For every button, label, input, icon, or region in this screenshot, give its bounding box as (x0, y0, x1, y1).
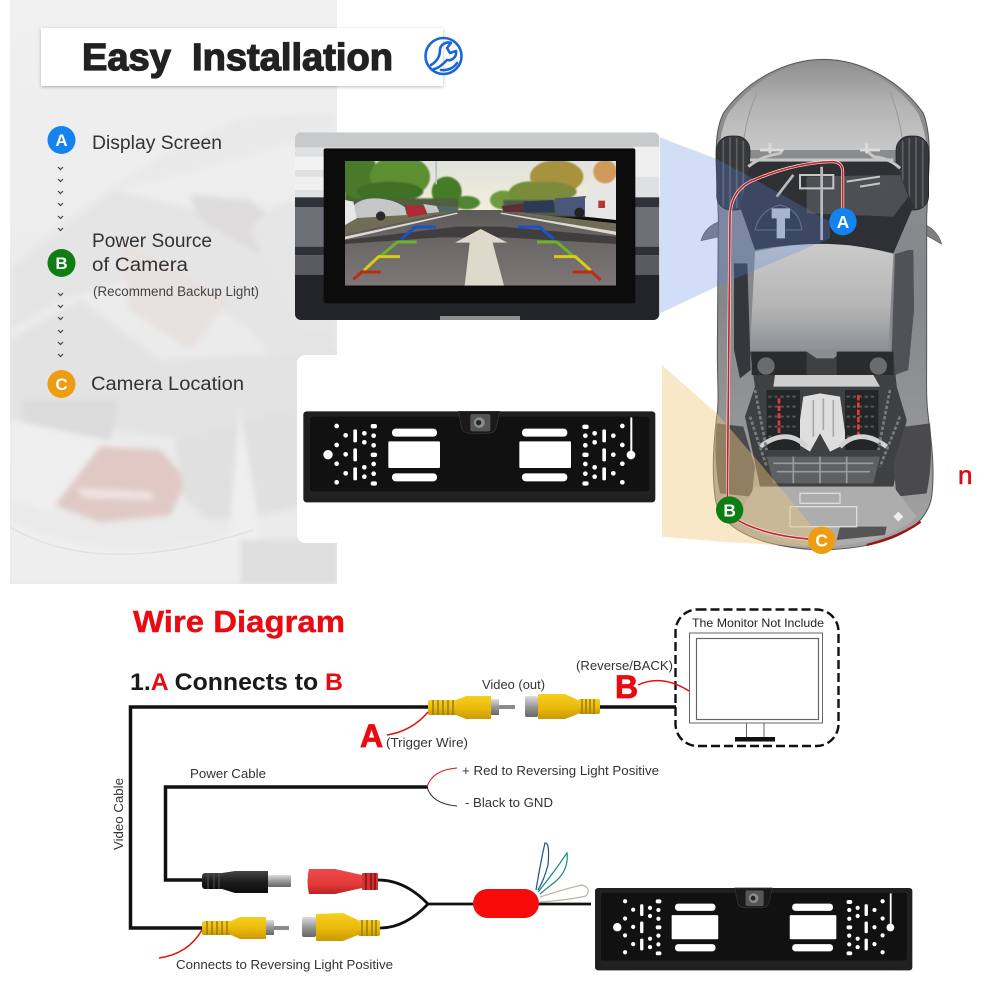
label B with leader: (Reverse/BACK) (576, 659, 673, 673)
title banner: Easy Installation (82, 37, 393, 79)
licence plate camera in wire diagram (595, 888, 912, 970)
label: video out: Video (out) (482, 678, 545, 692)
splitter wires (378, 880, 591, 928)
display screen photo panel (295, 132, 659, 320)
monitor bezel (324, 148, 635, 303)
label: black wire: - Black to GND (465, 796, 553, 810)
list item B: power source: of Camera (92, 255, 188, 276)
title banner (41, 28, 443, 86)
list item B: power source: B (55, 254, 68, 273)
connector: red DC socket (308, 869, 378, 894)
front wheels (716, 423, 931, 497)
list item C: camera location (48, 370, 244, 398)
list item A: display screen: Display Screen (92, 133, 222, 154)
subheading: A connects to B: 1.A Connects to B (130, 669, 343, 696)
connector: yellow RCA socket top (525, 694, 600, 719)
monitor illustration not included (676, 610, 838, 746)
list item C: camera location: Camera Location (91, 374, 244, 395)
marker B: B (723, 500, 736, 520)
connector: black DC plug (202, 871, 291, 893)
list item B: power source (48, 231, 259, 299)
cables: video and power (130, 707, 676, 928)
red junction box (473, 889, 539, 918)
list item C: camera location: C (55, 375, 68, 394)
rear cavity and suspension (740, 162, 913, 253)
label A with leader: (Trigger Wire) (386, 736, 468, 750)
marker A: A (837, 212, 850, 232)
marker C (808, 527, 835, 554)
label A with leader (360, 712, 468, 754)
chevrons A to B (58, 167, 63, 230)
parking guide lines (353, 227, 601, 280)
car body (713, 59, 933, 550)
roof (750, 244, 893, 350)
list item A: display screen (48, 126, 222, 154)
icon: wrench logo (426, 38, 462, 74)
connector: yellow RCA plug top (428, 696, 515, 719)
white card behind licence plate (297, 355, 663, 543)
connector: yellow RCA plug bottom (202, 917, 289, 939)
orange beam overlay (662, 365, 823, 547)
connector: yellow RCA socket bottom (302, 913, 380, 941)
side windows (734, 263, 751, 378)
label B with leader (576, 659, 689, 705)
label: power cable: Power Cable (190, 767, 266, 781)
leader to reversing light (159, 930, 202, 958)
marker B (716, 496, 743, 524)
trunk lid (720, 61, 927, 150)
chevrons B to C (58, 293, 63, 356)
parked cars (352, 198, 407, 218)
background panel: faded car photo (10, 0, 337, 584)
steering wheel (760, 253, 801, 269)
road (345, 210, 616, 286)
label A with leader: A (360, 718, 383, 754)
monitor illustration not included: The Monitor Not Include (692, 616, 824, 630)
road arrow (455, 229, 507, 286)
rear view camera scene (338, 155, 617, 286)
car top view with wiring (660, 59, 942, 554)
front bumper (737, 487, 917, 547)
stray red letter: n (958, 460, 972, 490)
power cable split wires (427, 768, 457, 806)
red wire (727, 162, 843, 498)
marker A (829, 208, 857, 235)
marker C: C (815, 531, 828, 551)
list item B: power source: (Recommend Backup Light) (93, 284, 259, 299)
list item A: display screen: A (55, 131, 68, 150)
heading: wire diagram: Wire Diagram (133, 604, 345, 639)
label: video cable: Video Cable (112, 778, 126, 850)
label B with leader: B (615, 669, 638, 705)
car mirrors (701, 222, 942, 244)
thin loop wires (536, 843, 588, 902)
list item B: power source: Power Source (92, 231, 212, 252)
rear wheels (717, 136, 929, 210)
label: connects to reversing light: Connects to Reversing Light Positive (176, 958, 393, 972)
engine bay (745, 352, 907, 487)
blue beam overlay (660, 137, 830, 313)
licence plate camera product (303, 411, 655, 502)
label: red wire: + Red to Reversing Light Positive (462, 764, 659, 778)
